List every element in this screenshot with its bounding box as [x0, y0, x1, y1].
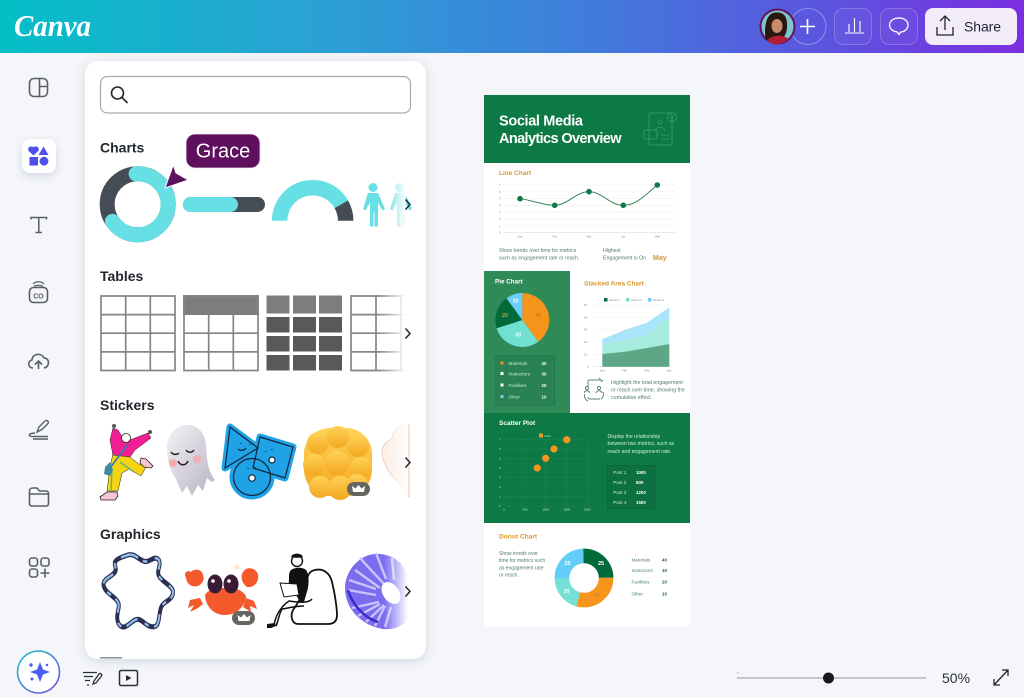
charts row fade: [385, 180, 406, 230]
donut legend: Facilities: [632, 580, 650, 585]
pie chart: [495, 293, 549, 347]
scatter table: Post 3: [613, 490, 627, 495]
section: line chart: [499, 170, 675, 262]
icon: brand: [30, 282, 48, 302]
sticker: ghost: [167, 425, 215, 496]
zoom controls: [737, 670, 1008, 686]
title: Social Media: [499, 114, 584, 130]
area legend: Series 2: [631, 298, 642, 302]
line chart: 4: [499, 203, 501, 207]
heading: Charts: Charts: [100, 140, 145, 156]
icon: projects: [30, 488, 48, 506]
pie chart: 40: [535, 313, 541, 319]
scatter plot: 0: [499, 504, 501, 508]
section: stacked area chart: [584, 280, 685, 401]
icon: draw: [29, 420, 48, 439]
add collaborator button: [790, 8, 826, 44]
scatter description: Display the relationship: [608, 434, 660, 440]
donut chart: 30: [593, 593, 600, 599]
pie legend: 30: [542, 371, 547, 376]
sidebar icons: [22, 78, 56, 578]
graphics row fade: [384, 551, 408, 633]
scatter plot: 7: [499, 437, 501, 441]
heading: Stacked Area Chart: Stacked Area Chart: [584, 280, 645, 288]
chevron: graphics: [406, 586, 410, 596]
line chart description: Show trends over time for metrics: [499, 248, 577, 254]
stacked area chart: [584, 298, 672, 372]
zoom level: 50%: [942, 670, 970, 686]
avatar: Grace: [760, 8, 796, 44]
line chart: 0: [499, 231, 501, 235]
line chart: 6: [499, 190, 501, 194]
graphic: person on beanbag: [267, 554, 337, 628]
zoom slider: [737, 672, 926, 684]
heading: Pie Chart: Pie Chart: [495, 278, 524, 286]
donut chart: [562, 556, 606, 600]
table two: [183, 295, 259, 370]
tables row fade: [378, 293, 406, 373]
pie chart: 30: [515, 332, 521, 338]
sticker: dancer: [100, 424, 153, 500]
infographic card: [484, 95, 690, 626]
donut legend: 20: [662, 580, 667, 585]
pie legend: [496, 356, 555, 405]
donut legend: Materials: [632, 558, 651, 563]
pie chart: 20: [502, 313, 508, 319]
donut legend: Other: [632, 592, 643, 597]
comments button: [880, 8, 918, 44]
table thumbnails: [101, 295, 405, 370]
heading: Line Chart: Line Chart: [499, 170, 532, 177]
scatter table: 1200: [636, 490, 646, 495]
area legend: Series 1: [609, 298, 620, 302]
scatter plot: 2000: [584, 508, 591, 512]
pie legend: Other: [508, 394, 520, 399]
AI assistant button: [18, 651, 60, 693]
line chart: Apr: [621, 234, 626, 238]
scatter table: 1000: [636, 470, 646, 475]
share button: Share: [964, 18, 1001, 34]
title: Analytics Overview: [499, 131, 622, 147]
search box: [100, 76, 410, 113]
stacked area chart: 10: [584, 352, 588, 356]
scatter description: between two metrics, such as: [608, 441, 675, 447]
icon: apps: [30, 558, 50, 578]
table four: [351, 296, 405, 370]
heading: Graphics: Graphics: [100, 526, 161, 542]
area legend: [604, 298, 664, 302]
graphic: crab: [185, 564, 258, 625]
sticker thumbnails: [100, 424, 409, 500]
line chart description: such as engagement rate or reach.: [499, 256, 579, 262]
heading: Scatter Plot: Scatter Plot: [499, 420, 536, 427]
scatter table: [607, 465, 655, 509]
graphic thumbnails: [103, 553, 408, 629]
section: donut chart: [499, 534, 667, 600]
chart thumbnails: [107, 174, 412, 235]
donut chart thumbnail: [107, 174, 168, 235]
line chart: 2: [499, 217, 501, 221]
area chart description: or reach over time, showing the: [611, 387, 685, 393]
stickers row fade: [386, 422, 408, 504]
clipped next heading: [100, 657, 122, 658]
icon: fullscreen: [994, 670, 1008, 685]
sticker: yellow cube: [303, 426, 372, 500]
pie chart: 10: [512, 298, 519, 304]
line chart: 1: [499, 224, 501, 228]
progress bar thumbnail: [183, 197, 265, 212]
donut chart: 25: [598, 561, 604, 567]
stacked area chart: Apr: [667, 368, 672, 372]
line chart: Mar: [587, 234, 591, 238]
scatter plot: 0: [503, 508, 505, 512]
line chart: 3: [499, 210, 501, 214]
people chart thumbnail: [363, 183, 412, 226]
line chart: 5: [499, 197, 501, 201]
scatter plot: 4: [499, 466, 501, 470]
table one: [101, 296, 175, 370]
scatter plot: [499, 434, 591, 512]
line chart: May: [655, 234, 661, 238]
line chart: Jan: [518, 234, 523, 238]
stacked area chart: 20: [584, 340, 588, 344]
table three: [266, 296, 342, 370]
highest engagement callout: Engagement is On: [603, 256, 646, 262]
share button: [925, 8, 1017, 45]
icon: uploads: [29, 354, 48, 369]
icon: brand: CO: [33, 294, 44, 300]
stacked area chart: Jan: [600, 368, 605, 372]
scatter plot: 5: [499, 456, 501, 460]
pie legend: 40: [542, 361, 547, 366]
stacked area chart: 30: [584, 328, 588, 332]
logo: Canva: Canva: [14, 8, 91, 43]
line chart: Feb: [552, 234, 558, 238]
pie legend: Facilities: [508, 383, 527, 388]
scatter plot: 2: [499, 485, 501, 489]
icon: design templates: [30, 78, 48, 96]
side panel: [85, 61, 426, 659]
graphic: wavy ring: [103, 555, 173, 627]
stacked area chart: Mar: [644, 368, 650, 372]
scatter table: 800: [636, 480, 644, 485]
scatter table: Post 1: [613, 470, 627, 475]
pie legend: 20: [542, 383, 547, 388]
pie legend: Instructors: [508, 371, 531, 376]
donut description: Show trends over: [499, 551, 538, 557]
area legend: Series 3: [653, 298, 664, 302]
scatter legend: Post: [544, 434, 551, 438]
stacked area chart: 0: [587, 365, 589, 369]
highest engagement callout: [603, 248, 667, 262]
donut legend: 30: [662, 568, 667, 573]
header band: [484, 95, 690, 163]
icon: text: [31, 218, 46, 232]
heading: Stickers: Stickers: [100, 397, 155, 413]
grace's cursor label: Grace: [196, 140, 250, 162]
highest engagement callout: Highest: [603, 248, 621, 254]
donut legend: [632, 558, 667, 597]
sticker: blue shapes: [225, 427, 293, 496]
half donut thumbnail: [280, 188, 346, 221]
pie legend: Materials: [508, 361, 528, 366]
donut description: time for metrics such: [499, 558, 545, 564]
scatter plot: 500: [522, 508, 528, 512]
icon: present: [120, 670, 138, 686]
icon: elements tab: [22, 139, 56, 173]
icon: notes: [83, 672, 102, 685]
icon: engagement cycle: [584, 378, 603, 401]
scatter plot: 1000: [542, 508, 549, 512]
scatter table: Post 2: [613, 480, 627, 485]
stacked area chart: 50: [584, 303, 588, 307]
top bar: [0, 0, 1024, 53]
donut legend: 40: [662, 558, 667, 563]
donut description: as engagement rate: [499, 565, 544, 571]
stacked area chart: Feb: [622, 368, 628, 372]
heading: Donut Chart: Donut Chart: [499, 534, 538, 540]
donut chart: 20: [563, 589, 570, 595]
line chart: 7: [499, 183, 501, 187]
stacked area chart: 40: [584, 315, 588, 319]
area chart description: cumulative effect.: [611, 395, 652, 401]
heading: Tables: Tables: [100, 268, 144, 284]
pie legend: 10: [542, 394, 547, 399]
scatter plot: 1: [499, 494, 501, 498]
chevron: charts: [406, 200, 410, 210]
graphic: purple spiral: [345, 553, 408, 629]
highest engagement callout: May: [653, 255, 667, 262]
donut legend: Instructors: [632, 568, 654, 573]
section: pie chart: [484, 271, 570, 413]
chevron: stickers: [406, 458, 410, 468]
chevron: tables: [406, 328, 410, 338]
insights button: [834, 8, 872, 44]
donut chart: 25: [564, 561, 571, 567]
sticker: pale shape: [382, 425, 409, 497]
donut legend: 10: [662, 592, 667, 597]
scatter table: Post 4: [613, 500, 627, 505]
scatter description: reach and engagement rate.: [608, 449, 672, 455]
area chart description: Highlight the total engagement: [611, 380, 683, 386]
donut description: or reach.: [499, 572, 519, 578]
scatter plot: 3: [499, 475, 501, 479]
icon: analytics device: [644, 112, 676, 145]
line chart: [499, 182, 675, 238]
scatter table: 1500: [636, 500, 646, 505]
scatter plot: 1500: [563, 508, 570, 512]
section: scatter plot: [484, 413, 690, 523]
grace's cursor label: [165, 134, 260, 188]
scatter plot: 6: [499, 447, 501, 451]
